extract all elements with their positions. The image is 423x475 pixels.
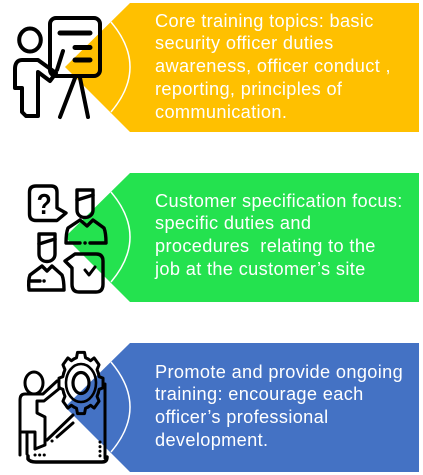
text: promote ongoing training: development. — [155, 430, 268, 450]
icon: staff with question and check: ? — [37, 188, 52, 220]
icon: presenter at board — [15, 18, 100, 117]
text: core training topics: awareness, officer conduct , — [155, 56, 391, 76]
text: customer specification focus: job at the customer’s site — [155, 259, 366, 279]
panel: ongoing training shape — [65, 343, 419, 472]
text: customer specification focus: Customer specification focus: — [155, 190, 403, 210]
icon: person turning gear — [20, 352, 107, 462]
text: core training topics — [155, 10, 391, 122]
panel: customer specification shape — [65, 173, 419, 302]
text: core training topics: Core training topics: basic — [155, 10, 374, 30]
text: promote ongoing training — [155, 362, 403, 450]
text: promote ongoing training: Promote and provide ongoing — [155, 362, 403, 382]
panel: core training shape — [65, 3, 419, 132]
text: customer specification focus: specific duties and — [155, 213, 311, 233]
text: promote ongoing training: officer’s professional — [155, 407, 329, 427]
text: core training topics: security officer duties — [155, 33, 334, 53]
text: customer specification focus — [154, 190, 403, 279]
text: core training topics: reporting, principles of — [155, 79, 342, 99]
text: promote ongoing training: training: encourage each — [155, 384, 364, 404]
text: core training topics: communication. — [155, 102, 287, 122]
text: customer specification focus: procedures relating to the — [155, 236, 376, 256]
icon: staff with question and check — [29, 186, 106, 292]
